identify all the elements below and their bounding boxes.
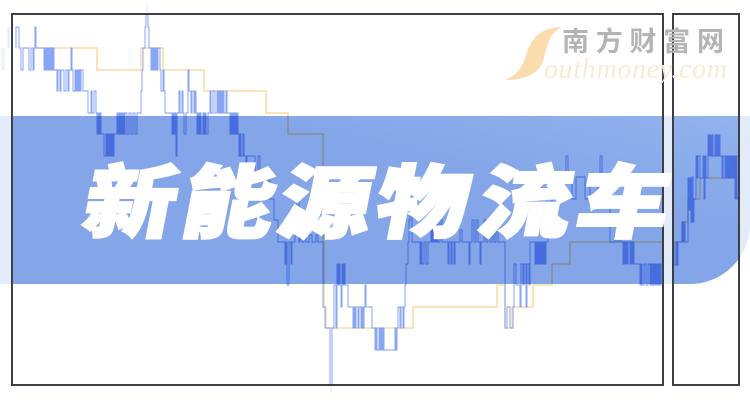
title: 新 — [77, 160, 185, 248]
logo: southmoney swoosh — [505, 27, 562, 80]
banner pale background — [0, 116, 750, 284]
title: 车 — [570, 160, 678, 248]
logo: southmoney.com: outhmoney.com — [544, 54, 727, 85]
title — [77, 160, 678, 248]
title: 源 — [272, 160, 380, 248]
gold step line chart — [36, 48, 735, 328]
frame: side panel — [673, 14, 739, 385]
faint chart traces outside the frames — [2, 5, 331, 393]
banner blue band — [0, 116, 750, 284]
title: 流 — [472, 160, 580, 248]
title: 能 — [175, 160, 283, 248]
title: 物 — [369, 160, 477, 248]
logo: chinese name: 南方财富网 — [562, 26, 724, 57]
